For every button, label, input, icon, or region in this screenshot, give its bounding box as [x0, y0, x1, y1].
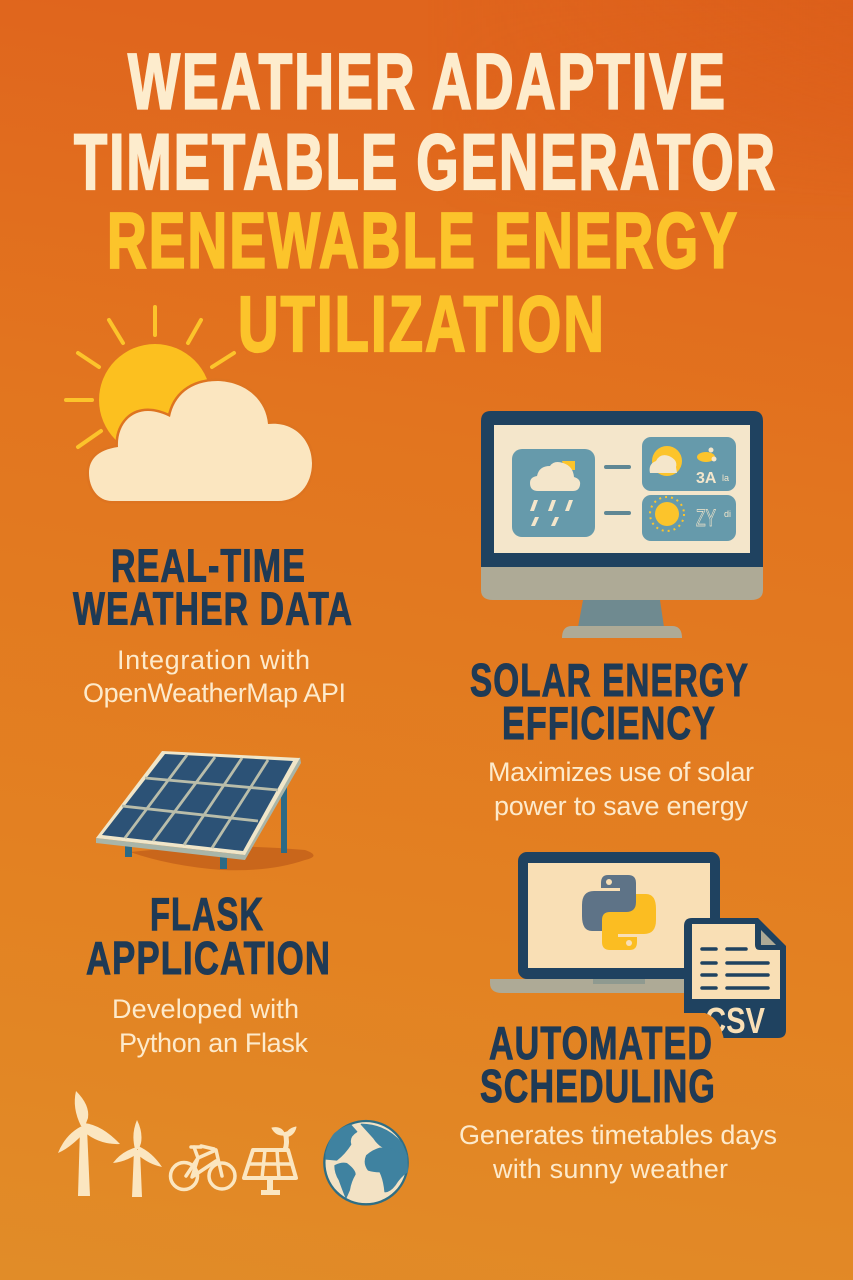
text: openweathermap integration: OpenWeatherMap API — [83, 678, 346, 708]
heading: flask application: APPLICATION — [86, 932, 331, 984]
text: timetable generation: Generates timetables days — [459, 1120, 777, 1150]
icon: desktop monitor with weather dashboard: ZY — [696, 505, 716, 532]
text: solar power savings: Maximizes use of solar — [488, 757, 754, 787]
panel: flask application — [86, 888, 331, 1058]
text: timetable generation — [459, 1120, 777, 1184]
text: solar power savings — [488, 757, 754, 821]
text: openweathermap integration: Integration with — [117, 645, 310, 675]
icon: solar panel with sprout — [244, 1127, 296, 1192]
panel: automated scheduling — [459, 1017, 777, 1184]
title — [74, 36, 777, 368]
icon: small wind turbine — [113, 1120, 162, 1197]
icon: sun behind cloud — [66, 307, 312, 501]
heading: solar energy efficiency: SOLAR ENERGY — [470, 654, 749, 706]
panel: real-time weather data — [73, 540, 353, 708]
panel: solar energy efficiency — [470, 654, 754, 821]
icon: bicycle — [170, 1146, 235, 1190]
heading: real-time weather data — [73, 540, 353, 634]
text: timetable generation: with sunny weather — [492, 1154, 728, 1184]
icon: csv file — [680, 918, 786, 1041]
icon: python logo — [582, 875, 656, 950]
heading: real-time weather data: WEATHER DATA — [73, 582, 353, 634]
icon: large wind turbine — [58, 1091, 120, 1196]
text: python and flask — [112, 994, 308, 1058]
title: UTILIZATION — [238, 279, 606, 368]
heading: solar energy efficiency — [470, 654, 749, 749]
icon: solar panel — [96, 751, 314, 870]
heading: solar energy efficiency: EFFICIENCY — [502, 697, 716, 749]
text: solar power savings: power to save energy — [494, 791, 748, 821]
heading: flask application — [86, 888, 331, 984]
text: python and flask: Developed with — [112, 994, 299, 1024]
icon: desktop monitor with weather dashboard: di — [724, 509, 731, 519]
heading: automated scheduling — [480, 1017, 716, 1112]
heading: real-time weather data: REAL-TIME — [111, 540, 306, 592]
icon: desktop monitor with weather dashboard: 3A — [696, 470, 717, 487]
heading: automated scheduling: AUTOMATED — [489, 1017, 713, 1069]
text: python and flask: Python an Flask — [119, 1028, 308, 1058]
icon: desktop monitor with weather dashboard — [481, 411, 763, 638]
heading: automated scheduling: SCHEDULING — [480, 1060, 716, 1112]
icon: desktop monitor with weather dashboard: la — [722, 473, 729, 483]
icon: globe — [324, 1121, 408, 1204]
icon: csv file: CSV — [705, 1000, 765, 1041]
text: openweathermap integration — [83, 645, 346, 708]
heading: flask application: FLASK — [150, 888, 264, 940]
icon: laptop with python logo — [490, 852, 720, 993]
